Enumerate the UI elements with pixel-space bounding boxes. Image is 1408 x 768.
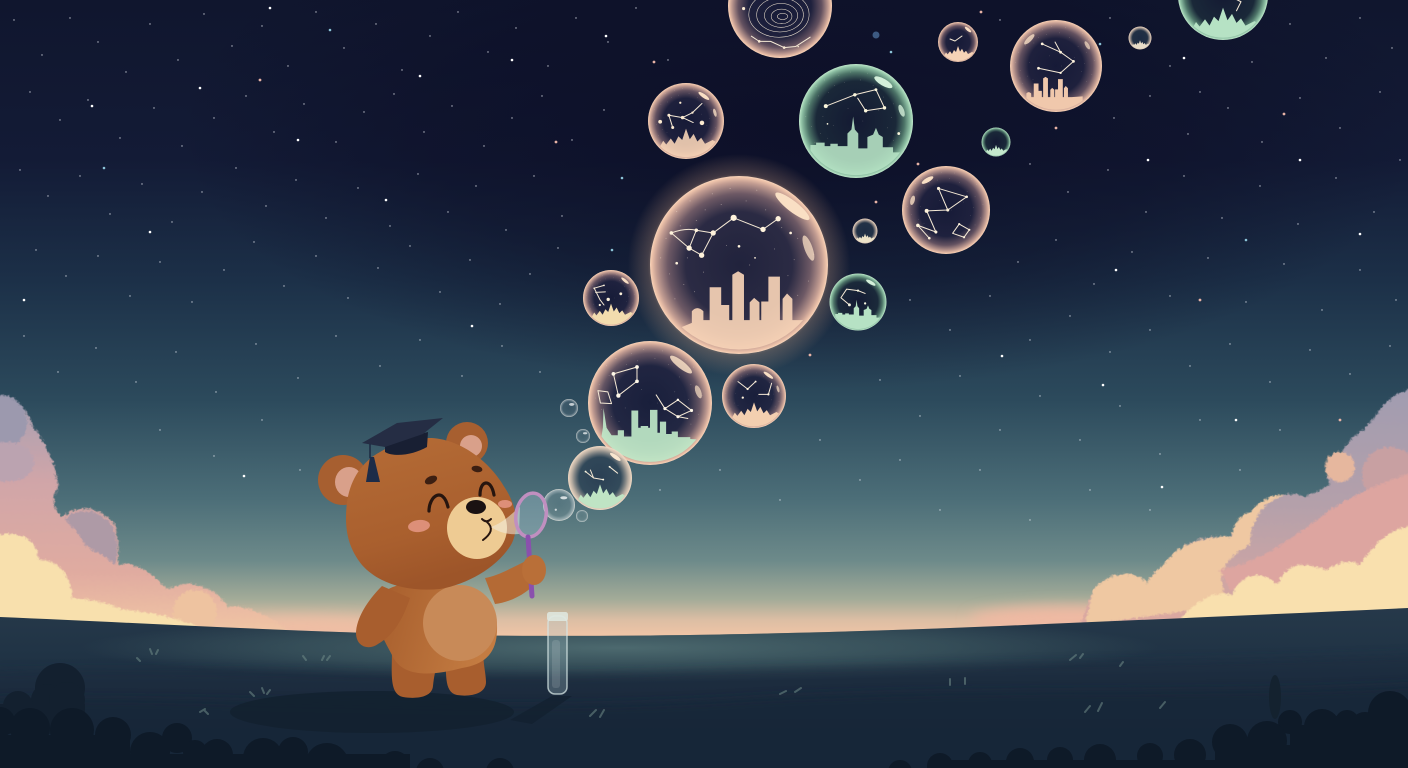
blown bubble cone [491,507,520,534]
ground layers [0,608,1408,768]
bubble: main glowing [628,154,850,376]
glass tube of bubble solution [547,612,568,694]
bear left arm [356,586,410,647]
bear head [346,438,516,590]
bubble: tiny centre [852,218,878,246]
bubble: top right tiny [1128,26,1152,52]
bubble: upper left [648,83,724,167]
bear tummy [423,585,497,661]
horizon pink haze: right [970,606,1170,634]
bear right arm and paw [485,560,540,604]
bubble: spiral galaxy [728,0,832,58]
stars [14,8,1400,520]
ear left [318,455,368,505]
bear blowing bubbles [318,418,550,698]
horizon pink haze: left [210,618,390,642]
bubble: large lower with mint city [588,341,712,477]
eyes and brows [429,483,494,511]
bubble: near wand translucent [568,446,632,516]
bear body [377,584,497,674]
bubble: mint large [799,64,913,189]
bubble: top right mint cut off [1178,0,1268,40]
bear feet and legs [392,645,486,698]
ground shadow of bear [230,691,514,733]
bubble: lower middle [722,364,786,434]
ear right [446,422,488,464]
bubble wand [512,491,550,596]
bubble: top right peach [1009,20,1102,118]
bubble: tiny mint [982,128,1010,159]
bear paw on wand [522,555,546,585]
cheeks [407,500,512,533]
tiny clear bubble 1 [560,399,578,417]
bubble: left medium [583,270,639,332]
graduation cap [362,418,443,482]
cloud: left [0,395,290,640]
foreground bushes: right [888,675,1408,768]
tiny clear bubble 3 [576,510,588,522]
tiny clear bubble 2 [576,429,590,443]
bubble: top small peach [938,22,978,66]
muzzle [447,497,507,559]
bubble trail [543,0,1268,522]
mouth [482,519,491,540]
clear bubble from wand [543,489,575,521]
bubble: mint medium [830,274,886,336]
bubble: right constellation [902,166,990,254]
dark upper sky haze [180,0,1408,390]
foreground bushes: left [0,663,514,768]
nose [466,500,486,514]
cloud: right [1080,390,1408,628]
